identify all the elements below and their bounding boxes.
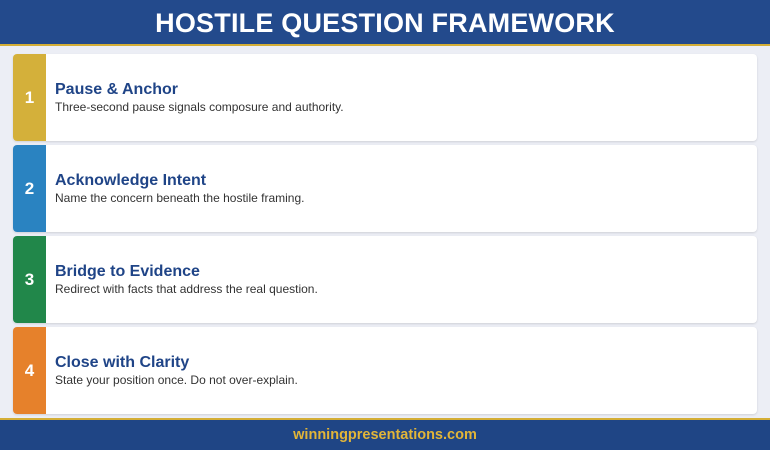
footer bbox=[0, 418, 770, 450]
title bbox=[0, 0, 770, 46]
footer: winningpresentations.com bbox=[293, 427, 477, 443]
card: step 3 bbox=[13, 236, 757, 323]
number badge 1 bbox=[13, 54, 46, 141]
step 1 text: Three-second pause signals composure and authority. bbox=[55, 100, 344, 114]
step 4 title: Close with Clarity bbox=[55, 354, 189, 371]
number badge 4: 4 bbox=[25, 361, 34, 380]
step 4 text: State your position once. Do not over-explain. bbox=[55, 373, 298, 387]
number badge 2 bbox=[13, 145, 46, 232]
step 3 title: Bridge to Evidence bbox=[55, 263, 200, 280]
step 1 title: Pause & Anchor bbox=[55, 81, 178, 98]
card: step 4 bbox=[13, 327, 757, 414]
step 2 title: Acknowledge Intent bbox=[55, 172, 206, 189]
step 2 text: Name the concern beneath the hostile framing. bbox=[55, 191, 304, 205]
number badge 3 bbox=[13, 236, 46, 323]
number badge 4 bbox=[13, 327, 46, 414]
number badge 1: 1 bbox=[25, 88, 34, 107]
card: step 2 bbox=[13, 145, 757, 232]
step 3 text: Redirect with facts that address the real question. bbox=[55, 282, 318, 296]
card: step 1 bbox=[13, 54, 757, 141]
title: HOSTILE QUESTION FRAMEWORK bbox=[155, 8, 615, 38]
number badge 2: 2 bbox=[25, 179, 34, 198]
number badge 3: 3 bbox=[25, 270, 34, 289]
